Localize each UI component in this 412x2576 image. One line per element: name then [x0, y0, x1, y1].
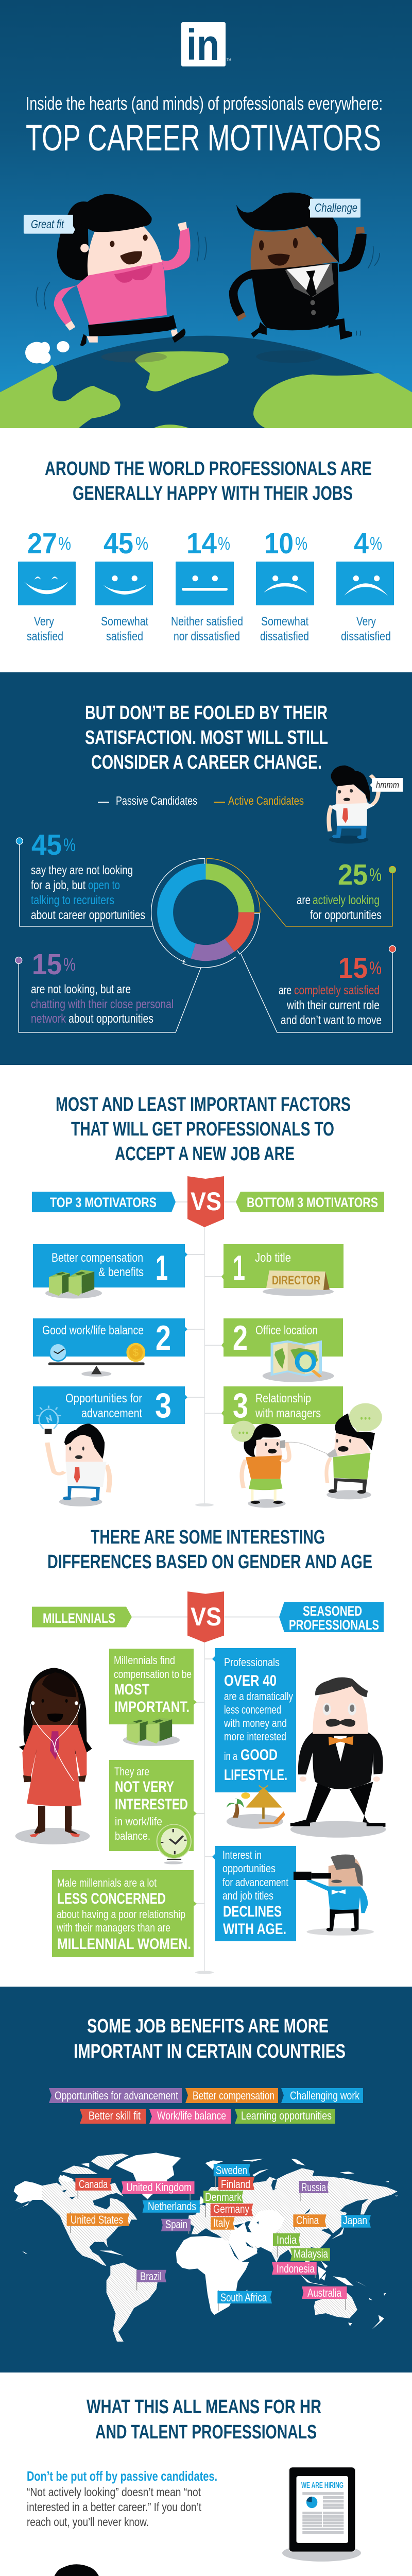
- box: over 40: in a: [224, 1750, 238, 1762]
- callout: 15% chatting with network: network: [31, 1012, 66, 1026]
- box: over 40: OVER 40: [224, 1672, 277, 1689]
- box: declines with age: opportunities: [222, 1862, 276, 1875]
- motivator 1: better compensation: Better compensation: [52, 1251, 143, 1265]
- callout: 45% open to recruiters: about career opportunities: [31, 908, 145, 922]
- motivator 2: work/life balance: Good work/life balance: [42, 1324, 144, 1337]
- legend: Active Candidates: [228, 794, 304, 807]
- flag: Japan: Japan: [343, 2214, 367, 2227]
- flag: South Africa: South Africa: [220, 2291, 267, 2304]
- callout: 25% actively looking: %: [369, 865, 382, 885]
- character: millennial woman: [15, 1668, 92, 1844]
- stat: 4% very dissatisfied: [336, 527, 394, 643]
- stat: 10% somewhat dissatisfied: Somewhat: [261, 615, 308, 629]
- motivator 3: opportunities for advancement: 3: [155, 1386, 171, 1425]
- stat: 45% somewhat satisfied: satisfied: [106, 630, 143, 643]
- character: man in suit running: [229, 193, 367, 340]
- callout: 45% open to recruiters: [16, 828, 153, 926]
- box: work/life balance: NOT VERY: [115, 1778, 174, 1795]
- callout: 25% actively looking: are: [297, 893, 311, 907]
- text block: passive candidates: interested in a better career.” If you don’t: [27, 2500, 201, 2514]
- callout: 15% chatting with network: %: [63, 955, 76, 975]
- flag: Sweden: Sweden: [216, 2164, 247, 2177]
- legend: job benefits: Opportunities for advancement: [55, 2089, 178, 2102]
- motivator 3: opportunities for advancement: [33, 1386, 187, 1506]
- motivator 2: work/life balance: 2: [156, 1318, 171, 1358]
- stat: 45% somewhat satisfied: Somewhat: [101, 615, 148, 629]
- banner: VS: VS: [191, 1602, 221, 1631]
- heading: [56, 1094, 351, 1165]
- legend: job benefits: Learning opportunities: [241, 2109, 332, 2122]
- callout: 15% chatting with network: [15, 948, 201, 1032]
- box: male millennials: about having a poor relationship: [57, 1908, 185, 1921]
- box: over 40: Professionals: [224, 1656, 280, 1669]
- text block: passive candidates: reach out, you’ll never know.: [27, 2515, 149, 2529]
- stat: 10% somewhat dissatisfied: dissatisfied: [260, 630, 309, 643]
- legend: [98, 794, 304, 807]
- callout: 45% open to recruiters: open to: [88, 878, 120, 892]
- world map: [14, 2153, 398, 2342]
- bottom motivator 1: job title: 1: [233, 1248, 245, 1287]
- heading: [47, 1527, 372, 1573]
- legend: job benefits: Work/life balance: [157, 2109, 226, 2122]
- callout: 45% open to recruiters: say they are not looking: [31, 863, 133, 877]
- callout: hmmm: hmmm: [376, 780, 399, 790]
- panel: passive and active candidates: [0, 672, 412, 1065]
- bottom motivator 3: relationship with managers: 3: [233, 1386, 248, 1425]
- banner: seasoned professionals: [279, 1602, 384, 1633]
- stat: 27% very satisfied: satisfied: [27, 630, 63, 643]
- banner: VS: [187, 1176, 224, 1227]
- box: declines with age: and job titles: [222, 1889, 273, 1902]
- box: declines with age: Interest in: [222, 1849, 262, 1861]
- heading: ACCEPT A NEW JOB ARE: [115, 1143, 295, 1165]
- stat: 10% somewhat dissatisfied: [256, 527, 314, 643]
- box: declines with age: WITH AGE.: [223, 1921, 286, 1938]
- box: over 40: more interested: [224, 1730, 286, 1743]
- motivator 2: work/life balance: [33, 1318, 187, 1377]
- flag: Spain: Spain: [165, 2218, 187, 2231]
- box: male millennials: MILLENNIAL WOMEN.: [57, 1936, 191, 1953]
- box: compensation: compensation to be: [114, 1668, 192, 1681]
- bottom motivator 3: relationship with managers: [221, 1386, 382, 1508]
- icon: LinkedIn logo: TM: [227, 59, 231, 62]
- bottom motivator 1: job title: Job title: [255, 1251, 291, 1265]
- flag: Brazil: Brazil: [140, 2270, 162, 2283]
- box: declines with age: [212, 1846, 296, 1941]
- box: over 40: LIFESTYLE.: [224, 1767, 287, 1784]
- panel: benefits by country: [0, 1987, 412, 2372]
- character: man with telescope: [294, 1855, 374, 1936]
- banner: millennials: [32, 1607, 132, 1628]
- callout: 15% completely satisfied: 15: [338, 952, 368, 985]
- illustration: woman at desk: [8, 2564, 128, 2576]
- callout: 15% completely satisfied: completely satisfied: [294, 984, 380, 997]
- box: declines with age: for advancement: [222, 1876, 288, 1889]
- bottom motivator 3: relationship with managers: with managers: [255, 1406, 321, 1420]
- stat: 14% neutral: nor dissatisfied: [174, 630, 240, 643]
- bottom motivator 1: job title: [221, 1244, 344, 1296]
- box: work/life balance: balance.: [115, 1829, 150, 1842]
- panel: gender and age differences: [0, 1527, 412, 1987]
- banner: VS: VS: [191, 1187, 221, 1216]
- heading: [45, 458, 372, 504]
- stat: 4% very dissatisfied: Very: [356, 615, 376, 629]
- banner: millennials: MILLENNIALS: [43, 1611, 115, 1626]
- motivator 1: better compensation: & benefits: [98, 1265, 144, 1279]
- stat: 10% somewhat dissatisfied: 10: [264, 527, 294, 560]
- bottom motivator 2: office location: 2: [233, 1318, 248, 1358]
- panel: hero header: [0, 0, 412, 428]
- stat: 14% neutral: %: [218, 534, 230, 554]
- flag: Russia: Russia: [301, 2181, 327, 2194]
- stat: 27% very satisfied: [18, 527, 76, 643]
- stat: 10% somewhat dissatisfied: %: [295, 534, 307, 554]
- callout: 15% chatting with network: chatting with their close personal: [31, 997, 174, 1011]
- motivator 1: better compensation: 1: [156, 1248, 168, 1287]
- callout: 45% open to recruiters: %: [63, 835, 76, 855]
- flag: India: India: [277, 2233, 297, 2246]
- banner: top 3 motivators: [32, 1192, 176, 1212]
- flag: Indonesia: Indonesia: [277, 2262, 315, 2275]
- text block: passive candidates: “Not actively looking” doesn’t mean “not: [27, 2485, 201, 2499]
- banner: seasoned professionals: PROFESSIONALS: [289, 1617, 379, 1633]
- box: male millennials: with their managers than are: [56, 1921, 170, 1934]
- flag: United Kingdom: United Kingdom: [126, 2181, 192, 2194]
- heading: AND TALENT PROFESSIONALS: [95, 2421, 317, 2443]
- callout: 15% completely satisfied: and don’t want to move: [281, 1013, 382, 1027]
- banner: bottom 3 motivators: [236, 1192, 384, 1212]
- character: seasoned man with moustache: [290, 1677, 386, 1838]
- flag: China: China: [296, 2214, 319, 2227]
- icon: LinkedIn logo: in: [186, 21, 219, 69]
- box: compensation: [109, 1649, 197, 1746]
- flag: Australia: Australia: [307, 2286, 342, 2299]
- callout: 25% actively looking: for opportunities: [310, 908, 382, 922]
- stat: 14% neutral: [171, 527, 243, 643]
- heading: [87, 2396, 321, 2443]
- stat: 4% very dissatisfied: %: [370, 534, 382, 554]
- character: thinking man: [329, 766, 403, 843]
- illustration: globe with running professionals: [0, 193, 412, 428]
- box: compensation: IMPORTANT.: [114, 1699, 190, 1716]
- flag: Malaysia: Malaysia: [294, 2247, 329, 2260]
- legend: job benefits: Better compensation: [193, 2089, 274, 2102]
- stat: 45% somewhat satisfied: 45: [104, 527, 133, 560]
- box: over 40: [212, 1648, 296, 1829]
- stat: 27% very satisfied: %: [58, 534, 71, 554]
- callout: 15% completely satisfied: with their current role: [286, 998, 380, 1012]
- motivator 2: work/life balance: $: [133, 1347, 139, 1359]
- callout: 15% chatting with network: 15: [32, 948, 62, 981]
- callout: 45% open to recruiters: talking to recruiters: [31, 893, 114, 907]
- icon: tablet with job ad: WE ARE HIRING: [301, 2481, 344, 2490]
- callout: 25% actively looking: 25: [338, 858, 368, 891]
- heading: CONSIDER A CAREER CHANGE.: [91, 752, 322, 773]
- box: declines with age: DECLINES: [223, 1903, 282, 1920]
- bottom motivator 2: office location: [221, 1318, 343, 1382]
- legend: job benefits: [49, 2088, 363, 2124]
- callout: 25% actively looking: [256, 858, 396, 926]
- stat: 45% somewhat satisfied: %: [135, 534, 148, 554]
- box: male millennials: Male millennials are a lot: [57, 1876, 157, 1889]
- callout: 25% actively looking: actively looking: [313, 893, 380, 907]
- box: male millennials: LESS CONCERNED: [57, 1890, 166, 1907]
- flag: Finland: Finland: [221, 2178, 250, 2191]
- flag: Denmark: Denmark: [205, 2191, 242, 2204]
- box: work/life balance: [109, 1760, 197, 1865]
- stat: 27% very satisfied: Very: [34, 615, 54, 629]
- motivator 3: opportunities for advancement: advancement: [81, 1406, 142, 1420]
- box: over 40: are a dramatically: [224, 1690, 293, 1703]
- box: over 40: less concerned: [224, 1703, 281, 1716]
- heading: [85, 702, 328, 773]
- bottom motivator 3: relationship with managers: Relationship: [255, 1392, 311, 1405]
- legend: job benefits: Challenging work: [290, 2089, 360, 2102]
- flag: Germany: Germany: [213, 2202, 249, 2215]
- banner: seasoned professionals: SEASONED: [303, 1603, 362, 1619]
- flag: United States: United States: [71, 2213, 123, 2226]
- box: over 40: with money and: [224, 1717, 287, 1730]
- flag: Canada: Canada: [79, 2178, 108, 2191]
- text block: passive candidates: [27, 2468, 217, 2529]
- callout: 15% chatting with network: are not looking, but are: [31, 982, 131, 996]
- stat: 45% somewhat satisfied: [95, 527, 153, 643]
- heading: SATISFACTION. MOST WILL STILL: [85, 727, 328, 749]
- heading: SOME JOB BENEFITS ARE MORE: [87, 2015, 329, 2037]
- banner: top 3 motivators: TOP 3 MOTIVATORS: [50, 1195, 157, 1210]
- motivator 3: opportunities for advancement: Opportunities for: [65, 1392, 142, 1405]
- bottom motivator 2: office location: Office location: [255, 1324, 318, 1337]
- callout: 15% completely satisfied: %: [369, 958, 382, 978]
- callout: 15% completely satisfied: [241, 946, 396, 1032]
- callout: Challenge: Challenge: [315, 201, 357, 214]
- box: over 40: GOOD: [241, 1747, 278, 1764]
- panel: most and least important factors: [0, 1065, 412, 1529]
- callout: 15% completely satisfied: are: [279, 984, 291, 997]
- heading: THERE ARE SOME INTERESTING: [91, 1527, 325, 1548]
- callout: 45% open to recruiters: for a job, but: [31, 878, 85, 892]
- bottom motivator 1: job title: DIRECTOR: [272, 1274, 320, 1287]
- heading: WHAT THIS ALL MEANS FOR HR: [87, 2396, 321, 2418]
- icon: tablet with job ad: [282, 2467, 361, 2562]
- box: male millennials: [52, 1870, 197, 1957]
- legend: Passive Candidates: [116, 794, 197, 807]
- stat: 4% very dissatisfied: dissatisfied: [341, 630, 391, 643]
- panel: what this means for HR: [0, 2372, 412, 2576]
- box: compensation: MOST: [114, 1681, 149, 1698]
- motivator 1: better compensation: [33, 1244, 187, 1298]
- heading: [74, 2015, 346, 2062]
- banner: VS: [187, 1591, 224, 1642]
- stat: 4% very dissatisfied: 4: [354, 527, 369, 560]
- stat: 14% neutral: Neither satisfied: [171, 615, 243, 629]
- callout: Great fit: Great fit: [31, 217, 64, 231]
- box: work/life balance: in work/life: [115, 1815, 162, 1828]
- panel: job satisfaction: [0, 428, 412, 672]
- character: woman running: [54, 194, 191, 346]
- flag: Italy: Italy: [213, 2216, 230, 2229]
- box: compensation: Millennials find: [114, 1654, 175, 1667]
- text block: passive candidates: Don’t be put off by passive candidates.: [27, 2468, 217, 2484]
- callout: 15% chatting with network: about opportunities: [68, 1012, 153, 1026]
- donut chart: [151, 858, 260, 968]
- callout: 45% open to recruiters: 45: [31, 828, 62, 861]
- legend: job benefits: Better skill fit: [89, 2109, 141, 2122]
- heading: BUT DON’T BE FOOLED BY THEIR: [85, 702, 328, 724]
- banner: bottom 3 motivators: BOTTOM 3 MOTIVATORS: [247, 1195, 378, 1210]
- stat: 14% neutral: 14: [186, 527, 217, 560]
- box: work/life balance: INTERESTED: [115, 1796, 188, 1813]
- box: work/life balance: They are: [114, 1765, 149, 1778]
- flag: Netherlands: Netherlands: [148, 2200, 196, 2213]
- stat: 27% very satisfied: 27: [27, 527, 57, 560]
